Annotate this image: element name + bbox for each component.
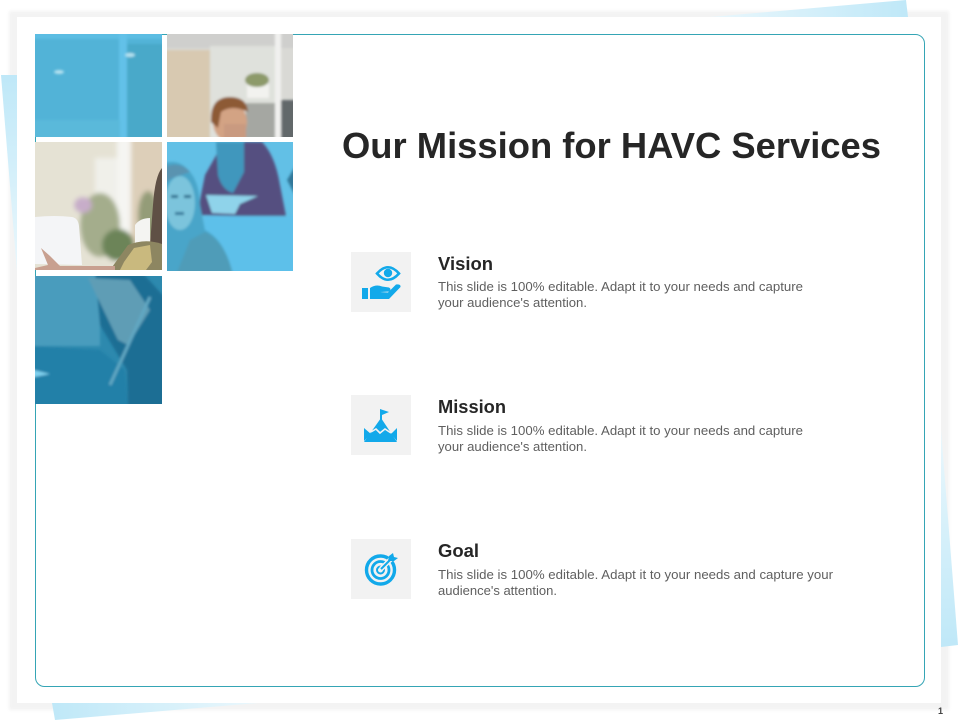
text: Goal description: audience's attention. [438, 584, 557, 598]
text: Vision description: your audience's attention. [438, 296, 587, 310]
icon: mountain with flag [351, 395, 411, 455]
item: Goal [351, 539, 833, 599]
text: Goal description: This slide is 100% editable. Adapt it to your needs and capture your [438, 568, 833, 582]
photo tile: blue glass wall [35, 34, 162, 137]
text: Vision description: This slide is 100% editable. Adapt it to your needs and capture [438, 280, 803, 294]
page number: 1 [938, 706, 943, 716]
photo collage [30, 28, 300, 410]
decorative blue wedge: right [941, 430, 958, 647]
heading: Mission: Mission [438, 396, 506, 417]
photo tile: dark blue woman's lap [35, 276, 162, 404]
heading: Vision: Vision [438, 253, 493, 274]
decorative blue wedge: left [1, 75, 17, 272]
photo tile: woman's hair and blurred office [35, 142, 162, 270]
text: Mission description: your audience's attention. [438, 440, 587, 454]
item: Vision [351, 252, 803, 312]
icon: hand holding eye [351, 252, 411, 312]
title: Our Mission for HAVC Services [342, 125, 881, 166]
photo tile: man in office [167, 34, 293, 137]
text: Mission description: This slide is 100% editable. Adapt it to your needs and capture [438, 424, 803, 438]
photo tile: blue-tinted woman and man [167, 142, 293, 271]
item: Mission [351, 395, 803, 455]
icon: target with arrow [351, 539, 411, 599]
decorative blue wedge: top right [710, 0, 908, 17]
decorative blue wedge: bottom left [52, 703, 258, 720]
heading: Goal: Goal [438, 540, 479, 561]
